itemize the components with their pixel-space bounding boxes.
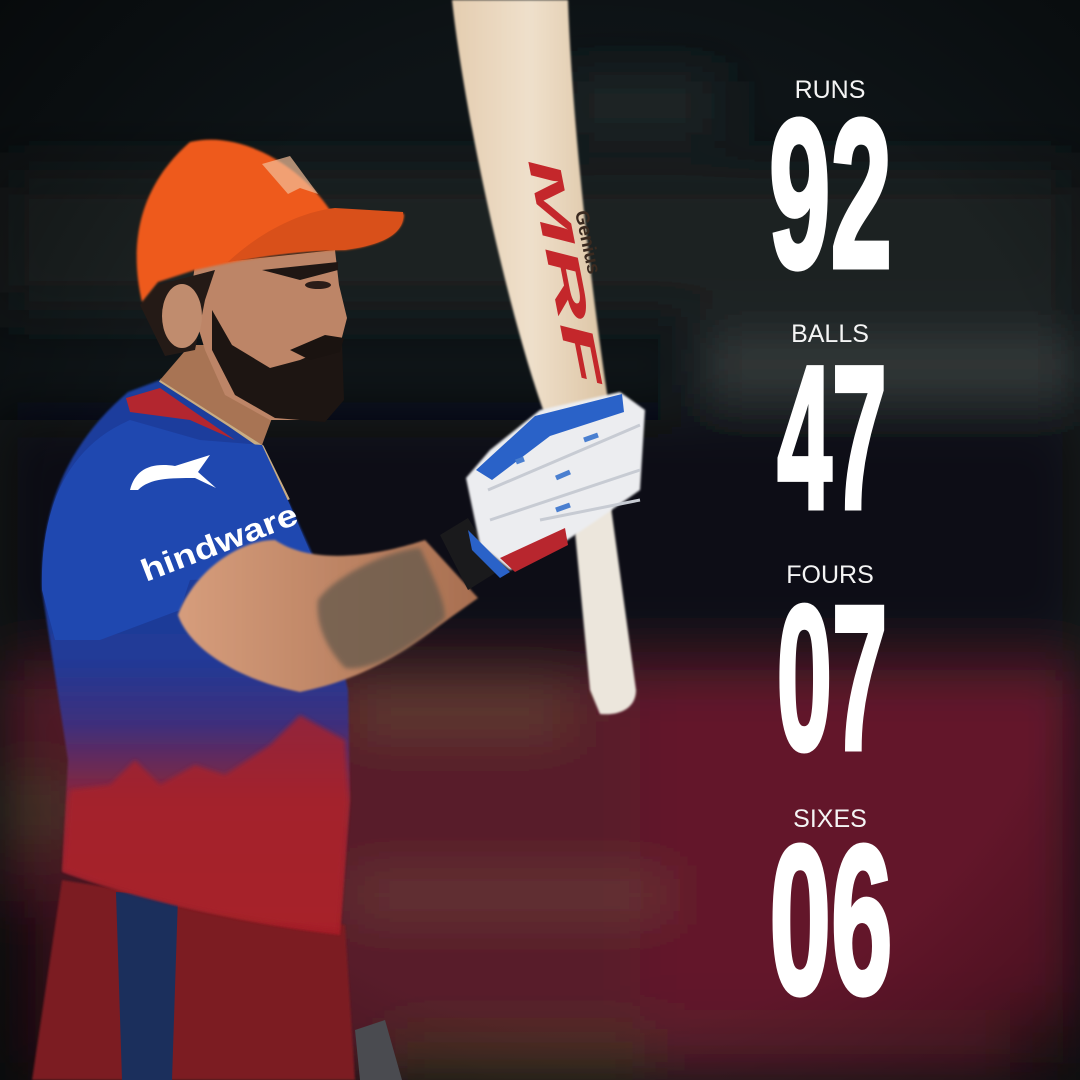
bat sticker: Genius bbox=[570, 209, 604, 276]
trouser blue stripe bbox=[116, 892, 178, 1080]
face bbox=[190, 250, 347, 420]
trousers bbox=[32, 880, 355, 1080]
sponsor text: hindware bbox=[136, 497, 303, 589]
stat: sixes: 06 bbox=[769, 801, 893, 1038]
wrist band bbox=[440, 518, 500, 590]
stat: balls: BALLS bbox=[791, 320, 869, 348]
stat: runs: RUNS bbox=[795, 76, 865, 104]
beard bbox=[212, 310, 344, 422]
bat sticker: MRF bbox=[518, 153, 611, 392]
jersey bbox=[42, 380, 350, 935]
stat: sixes: SIXES bbox=[793, 805, 867, 833]
hair bbox=[140, 270, 215, 356]
tattoo bbox=[318, 548, 445, 668]
collar red panel bbox=[126, 388, 235, 440]
moustache bbox=[290, 335, 344, 360]
cap bbox=[137, 140, 404, 302]
ear bbox=[162, 284, 202, 348]
glove bbox=[466, 392, 645, 578]
sleeve bbox=[42, 420, 320, 640]
collar gold trim bbox=[160, 380, 288, 500]
bat handle bbox=[572, 500, 636, 714]
neck bbox=[160, 345, 275, 445]
player bbox=[32, 0, 645, 1080]
jersey red flames bbox=[64, 715, 348, 930]
puma logo bbox=[130, 455, 216, 490]
stat: fours: FOURS bbox=[786, 561, 874, 589]
cap logo bbox=[262, 156, 318, 194]
stat: fours: 07 bbox=[777, 564, 887, 794]
upper arm bbox=[178, 540, 478, 692]
bat blade bbox=[452, 0, 608, 415]
lower trouser item bbox=[355, 1020, 402, 1080]
stat: balls: 47 bbox=[777, 323, 887, 551]
cap shade bbox=[228, 208, 403, 262]
bat sticker bbox=[518, 153, 611, 392]
eyebrow and eye bbox=[262, 262, 338, 280]
stat: runs: 92 bbox=[769, 75, 892, 312]
